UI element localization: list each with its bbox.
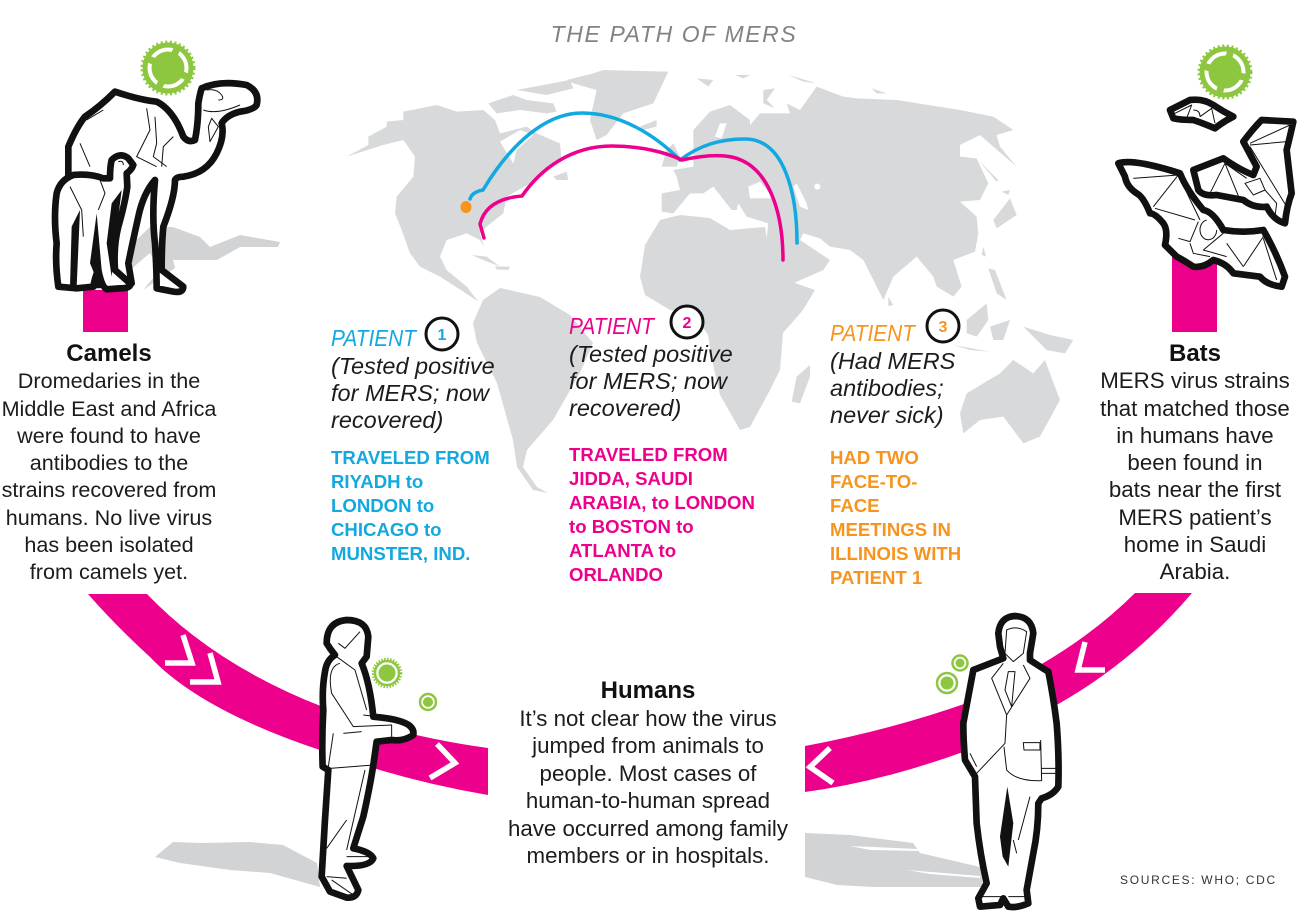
patient 1 status: (Tested positive bbox=[331, 353, 495, 379]
text block: bats bbox=[1100, 340, 1290, 584]
patient 1 travel: LONDON to bbox=[331, 495, 434, 516]
pink band: camels to humans bbox=[88, 594, 488, 795]
patient 1 travel: RIYADH to bbox=[331, 471, 423, 492]
patient 3 status: antibodies; bbox=[830, 375, 944, 401]
patient 2 badge: 2 bbox=[683, 315, 692, 332]
patient 2 status: recovered) bbox=[569, 395, 681, 421]
pink stand: camels bbox=[83, 290, 128, 332]
patient 1 status bbox=[331, 353, 495, 433]
patient 2 travel: TRAVELED FROM bbox=[569, 444, 728, 465]
bats illustration bbox=[1118, 45, 1293, 287]
patient 1 travel bbox=[331, 447, 490, 564]
body: bats: been found in bbox=[1127, 450, 1263, 475]
patient 2 badge bbox=[671, 306, 703, 338]
body: bats: Arabia. bbox=[1160, 559, 1230, 584]
adult and baby camel bbox=[55, 83, 257, 292]
camel illustration bbox=[55, 39, 280, 292]
route: patient 2 bbox=[480, 146, 783, 260]
patient 3 meetings: FACE-TO- bbox=[830, 471, 917, 492]
patient 1 travel: CHICAGO to bbox=[331, 519, 442, 540]
body: bats: that matched those bbox=[1100, 396, 1290, 421]
left human figure bbox=[155, 620, 436, 898]
patient 2 travel: ATLANTA to bbox=[569, 540, 676, 561]
patient 3 status: never sick) bbox=[830, 402, 944, 428]
patient 2 label: PATIENT bbox=[569, 313, 656, 339]
body: humans: members or in hospitals. bbox=[527, 843, 769, 868]
body: humans bbox=[508, 706, 789, 868]
patient 1 status: for MERS; now bbox=[331, 380, 491, 406]
panel: patient 2 bbox=[569, 306, 755, 585]
world map bbox=[347, 70, 1073, 493]
patient 3 badge: 3 bbox=[939, 319, 948, 336]
small virus left bbox=[420, 694, 436, 710]
body: camels: from camels yet. bbox=[30, 559, 188, 584]
arrow chevrons: right band bbox=[810, 642, 1105, 783]
patient 1 badge: 1 bbox=[438, 327, 447, 344]
location dot: patient 3 bbox=[460, 201, 472, 213]
patient 3 meetings: PATIENT 1 bbox=[830, 567, 922, 588]
virus right upper bbox=[952, 656, 968, 670]
patient 3 meetings: HAD TWO bbox=[830, 447, 919, 468]
patient 2 travel: ARABIA, to LONDON bbox=[569, 492, 755, 513]
pink band: bats to humans bbox=[805, 593, 1192, 792]
patient 2 travel: JIDDA, SAUDI bbox=[569, 468, 693, 489]
patient 2 travel bbox=[569, 444, 755, 585]
body: humans: have occurred among family bbox=[508, 816, 789, 841]
body: camels bbox=[2, 368, 217, 584]
patient 3 meetings: FACE bbox=[830, 495, 880, 516]
heading: camels: Camels bbox=[66, 340, 152, 367]
body: bats: bats near the first bbox=[1109, 477, 1282, 502]
title: THE PATH OF MERS bbox=[551, 21, 797, 47]
body: bats: MERS patient’s bbox=[1118, 505, 1272, 530]
patient 2 travel: to BOSTON to bbox=[569, 516, 694, 537]
left bat bbox=[1118, 162, 1285, 287]
patient 2 status: for MERS; now bbox=[569, 368, 729, 394]
body: camels: were found to have bbox=[16, 423, 201, 448]
patient 1 travel: MUNSTER, IND. bbox=[331, 543, 470, 564]
body: camels: has been isolated bbox=[24, 532, 194, 557]
patient 1 label: PATIENT bbox=[331, 325, 418, 351]
body: bats: MERS virus strains bbox=[1100, 368, 1290, 393]
body: bats: home in Saudi bbox=[1124, 532, 1266, 557]
pink stand: bats bbox=[1172, 257, 1217, 332]
route: patient 1 bbox=[470, 113, 797, 243]
text block: humans bbox=[508, 677, 789, 868]
patient 3 badge bbox=[927, 310, 959, 342]
body: camels: strains recovered from bbox=[2, 477, 216, 502]
body: bats bbox=[1100, 368, 1290, 584]
man facing front bbox=[963, 616, 1059, 907]
text block: camels bbox=[2, 340, 217, 584]
patient 3 meetings: ILLINOIS WITH bbox=[830, 543, 961, 564]
body: camels: humans. No live virus bbox=[6, 505, 212, 530]
body: camels: Dromedaries in the bbox=[18, 368, 200, 393]
shadow slits bbox=[850, 846, 980, 878]
patient 3 meetings bbox=[830, 447, 961, 588]
body: humans: people. Most cases of bbox=[540, 761, 757, 786]
large virus left bbox=[373, 659, 401, 687]
virus right lower bbox=[937, 673, 957, 693]
heading: bats: Bats bbox=[1169, 340, 1221, 367]
arrow chevrons: left band bbox=[165, 635, 455, 778]
panel: patient 3 bbox=[830, 310, 961, 588]
man in profile bbox=[322, 620, 413, 898]
camel shadow bbox=[130, 227, 280, 290]
patient 3 status: (Had MERS bbox=[830, 348, 956, 374]
patient 2 travel: ORLANDO bbox=[569, 564, 663, 585]
panel: patient 1 bbox=[331, 318, 495, 564]
body: camels: antibodies to the bbox=[30, 450, 188, 475]
heading: humans: Humans bbox=[601, 677, 695, 704]
virus on camel bbox=[139, 39, 197, 97]
body: humans: jumped from animals to bbox=[531, 733, 764, 758]
patient 3 meetings: MEETINGS IN bbox=[830, 519, 951, 540]
small bat bbox=[1170, 100, 1233, 128]
patient 2 status bbox=[569, 341, 733, 421]
body: humans: It’s not clear how the virus bbox=[519, 706, 777, 731]
virus on bats bbox=[1198, 45, 1252, 99]
body: camels: Middle East and Africa bbox=[2, 396, 217, 421]
right bat bbox=[1193, 120, 1293, 223]
body: humans: human-to-human spread bbox=[526, 788, 770, 813]
right shadow bbox=[805, 833, 983, 887]
patient 3 label: PATIENT bbox=[830, 320, 917, 346]
right human figure bbox=[805, 616, 1059, 907]
body: bats: in humans have bbox=[1116, 423, 1274, 448]
patient 1 badge bbox=[426, 318, 458, 350]
sources: SOURCES: WHO; CDC bbox=[1120, 873, 1277, 887]
left shadow bbox=[155, 842, 320, 887]
patient 3 status bbox=[830, 348, 956, 428]
patient 1 travel: TRAVELED FROM bbox=[331, 447, 490, 468]
patient 2 status: (Tested positive bbox=[569, 341, 733, 367]
patient 1 status: recovered) bbox=[331, 407, 443, 433]
